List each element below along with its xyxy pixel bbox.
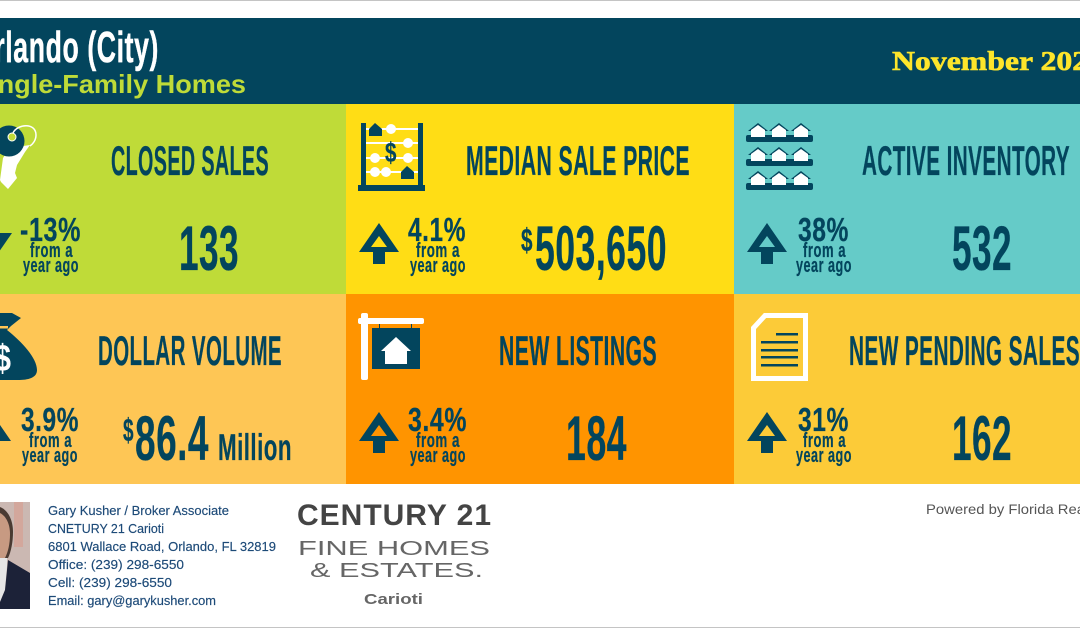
icon: up arrow [359,223,399,264]
icon: houses on shelves [746,123,813,190]
icon: document [754,316,806,378]
value: 503,650 [535,214,667,284]
date: November 2024 [892,46,1080,76]
panel: dollar volume [0,294,346,484]
heading: NEW LISTINGS [499,327,657,374]
icon: abacus: $ [385,137,397,168]
value: 133 [179,214,239,284]
change: -13% [20,211,81,248]
value: $ [123,412,134,448]
change: from a [416,430,460,452]
change: from a [30,240,73,262]
icon: for sale sign [358,313,424,380]
change: from a [416,240,460,262]
change [21,401,79,467]
brokerage logo: FINE HOMES [298,538,490,560]
value: 86.4 [135,404,209,474]
icon: up arrow [0,412,11,453]
value: 532 [952,214,1012,284]
change: 3.4% [408,401,467,438]
change: from a [803,240,846,262]
change: year ago [23,255,79,277]
brokerage logo: & ESTATES. [310,560,483,582]
agent contact details: Office: (239) 298-6550 [48,558,184,572]
agent contact details: CNETURY 21 Carioti [48,522,164,536]
value: $ [521,222,533,258]
icon: up arrow [747,412,787,453]
agent contact details: Cell: (239) 298-6550 [48,576,172,590]
icon: money bag [0,313,37,380]
panel: new pending sales [734,294,1080,484]
icon: down arrow [0,233,12,262]
icon: keys [0,126,36,189]
icon: abacus [358,123,425,191]
change: year ago [796,445,852,467]
change: year ago [410,255,466,277]
agent contact details: Email: gary@garykusher.com [48,594,216,608]
change: from a [803,430,846,452]
panel: active inventory [734,104,1080,294]
panel: dollar volume: DOLLAR VOLUME [98,327,282,374]
change [408,211,466,277]
change: 38% [798,211,849,248]
change [796,401,852,467]
agent contact details: Gary Kusher / Broker Associate [48,504,229,518]
change [796,211,852,277]
change: year ago [22,445,78,467]
agent photo [0,502,30,609]
header banner [0,18,1080,104]
change: from a [29,430,72,452]
panel: closed sales [0,104,346,294]
change: year ago [410,445,466,467]
change: 3.9% [21,401,79,438]
change: 31% [798,401,849,438]
change: 4.1% [408,211,466,248]
icon: up arrow [747,223,787,264]
panel: closed sales: CLOSED SALES [111,137,269,184]
value: 162 [952,404,1012,474]
panel: median sale price [346,104,734,294]
change [20,211,81,277]
change: year ago [796,255,852,277]
panel: new listings [346,294,734,484]
heading: MEDIAN SALE PRICE [466,137,690,184]
icon: up arrow [359,412,399,453]
brokerage logo: Carioti [364,591,423,608]
brokerage logo [297,499,491,608]
brokerage logo: CENTURY 21 [297,499,491,532]
value [521,214,667,284]
value: 184 [566,404,627,474]
agent contact details: 6801 Wallace Road, Orlando, FL 32819 [48,540,276,554]
agent contact details [48,504,276,608]
change [408,401,467,467]
value: Million [218,427,292,468]
